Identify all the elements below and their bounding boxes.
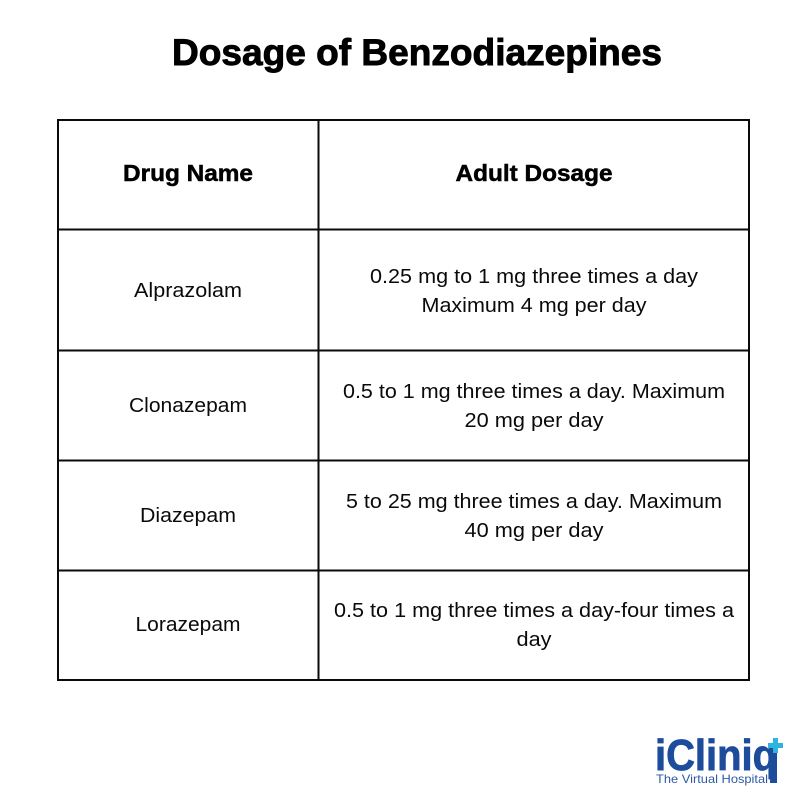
row: lorazepam dosage: day [516,629,552,651]
row: alprazolam name: Alprazolam [134,280,242,302]
row: lorazepam dosage [334,600,735,651]
row: alprazolam dosage [370,266,698,317]
row: alprazolam dosage: 0.25 mg to 1 mg three times a day [370,266,698,288]
icon: plus [768,738,783,753]
row: diazepam dosage [346,491,722,542]
row: clonazepam dosage: 20 mg per day [464,410,604,432]
row: diazepam dosage: 40 mg per day [464,520,604,542]
logo q stem [770,748,777,783]
logo tagline: The Virtual Hospital [656,772,768,786]
row: diazepam name: Diazepam [140,505,236,527]
row: alprazolam dosage: Maximum 4 mg per day [422,295,646,317]
row: lorazepam name: Lorazepam [136,614,240,636]
table [58,120,749,680]
row: diazepam dosage: 5 to 25 mg three times a day. Maximum [346,491,722,513]
row: clonazepam dosage: 0.5 to 1 mg three times a day. Maximum [343,381,725,403]
row: clonazepam name: Clonazepam [129,395,247,417]
header: drug name: Drug Name [123,160,253,186]
logo wordmark: iCliniq [655,731,777,780]
row: clonazepam dosage [343,381,725,432]
table grid [58,120,749,680]
header: adult dosage: Adult Dosage [456,160,612,186]
title: Dosage of Benzodiazepines [172,32,662,73]
row: lorazepam dosage: 0.5 to 1 mg three times a day-four times a [334,600,735,622]
logo: iCliniq [655,731,783,786]
